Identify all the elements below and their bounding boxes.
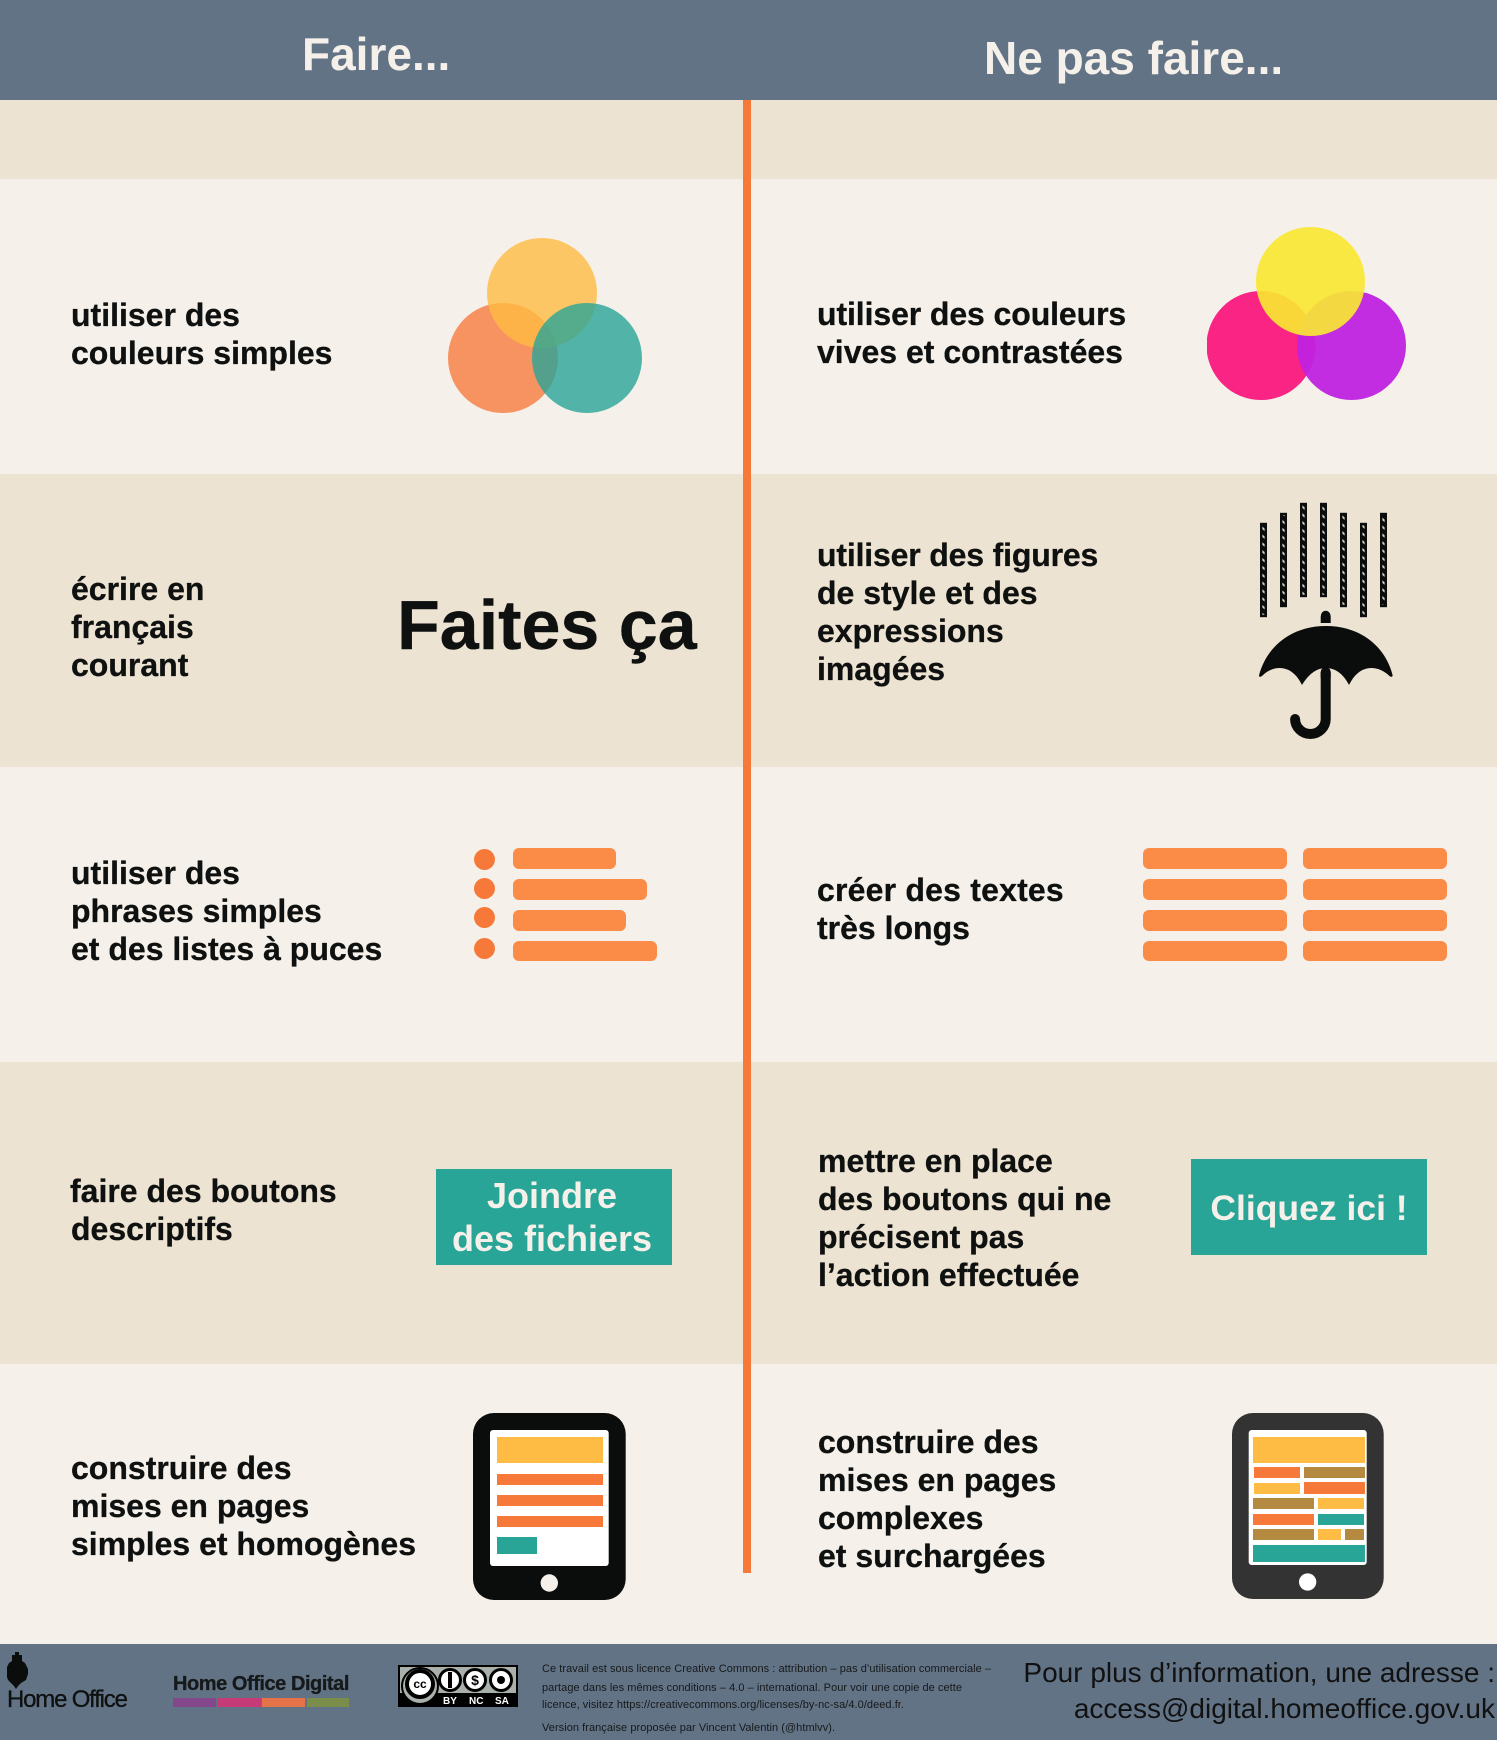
icon: vivid colour circles (1207, 227, 1406, 400)
licence badge: CC BY NC SA: $ (471, 1672, 479, 1688)
text: utiliser des couleurs simples (71, 297, 332, 371)
text: écrire en français courant: écrire en (71, 571, 204, 607)
icon: long text blocks (1143, 848, 1447, 961)
text: mises en pages complexes: et surchargées (818, 1538, 1046, 1574)
text: écrire en français courant: courant (71, 647, 188, 683)
colour strip (173, 1698, 216, 1707)
logo: Home Office Digital (173, 1673, 349, 1707)
licence text: partage dans les mêmes conditions – 4.0 – international. Pour voir une copie de cette (542, 1682, 962, 1694)
text: utiliser des couleurs vives: vives et contrastées (817, 334, 1123, 370)
footer bar (0, 1644, 1497, 1740)
button: Joindre des fichiers: des fichiers (452, 1218, 652, 1259)
icon: soft colour circles (448, 238, 642, 413)
text: mises en pages simples (71, 1450, 416, 1562)
text: utiliser des couleurs vives (817, 296, 1126, 370)
umbrella (1259, 611, 1393, 685)
licence text: Version française proposée par Vincent Valentin (@htmlvv). (542, 1722, 835, 1734)
text: textes très longs: très longs (817, 910, 970, 946)
button: Joindre des fichiers (436, 1169, 672, 1265)
contact text (1023, 1657, 1495, 1724)
header bar (0, 0, 1497, 100)
icon: bullet list (474, 848, 657, 961)
licence text (542, 1663, 991, 1734)
text: boutons sans action: l’action effectuée (818, 1257, 1079, 1293)
wordmark: Home Office Digital (173, 1673, 349, 1695)
text: figures de style: de style et des (817, 575, 1038, 611)
band: row 2 (0, 474, 1497, 767)
licence badge: CC BY NC SA: cc (413, 1677, 427, 1691)
button: Joindre des fichiers: Joindre (487, 1175, 617, 1216)
text: boutons sans action: précisent pas (818, 1219, 1024, 1255)
band: top beige (0, 100, 1497, 179)
text: mises en pages complexes (818, 1424, 1056, 1574)
text: boutons descriptifs: descriptifs (71, 1211, 233, 1247)
text: mises en pages complexes: mises en pages (818, 1462, 1056, 1498)
heading: Faire: Faire... (302, 28, 450, 80)
text: phrases simples: et des listes à puces (71, 931, 382, 967)
icon: complex tablet (1232, 1413, 1384, 1599)
button: Cliquez ici: Cliquez ici ! (1210, 1188, 1408, 1228)
heading: Ne pas faire: Ne pas faire... (984, 32, 1283, 84)
text: textes très longs (817, 872, 1064, 946)
band: row 4 (0, 1062, 1497, 1364)
text: boutons descriptifs: faire des boutons (70, 1173, 337, 1209)
rain streaks (1261, 504, 1386, 616)
licence badge: CC BY NC SA: SA (495, 1696, 509, 1707)
contact text: Pour plus d’information, une adresse : (1023, 1657, 1495, 1688)
text: utiliser des couleurs simples: couleurs simples (71, 335, 332, 371)
text: utiliser des couleurs vives: utiliser des couleurs (817, 296, 1126, 332)
text: boutons sans action: mettre en place (818, 1143, 1053, 1179)
icon: simple tablet (473, 1413, 626, 1600)
text: boutons sans action (818, 1143, 1111, 1293)
text: boutons sans action: des boutons qui ne (818, 1181, 1111, 1217)
button: Cliquez ici (1191, 1159, 1427, 1255)
text: boutons descriptifs (70, 1173, 337, 1247)
text: écrire en français courant (71, 571, 204, 683)
text: écrire en français courant: français (71, 609, 194, 645)
text: figures de style: imagées (817, 651, 945, 687)
example text: Faites ça: Faites ça (397, 586, 697, 664)
crest (7, 1652, 28, 1689)
text: mises en pages simples: mises en pages (71, 1488, 309, 1524)
text: mises en pages simples: construire des (71, 1450, 292, 1486)
text: textes très longs: créer des textes (817, 872, 1064, 908)
licence badge: CC BY NC SA: BY (443, 1696, 457, 1707)
logo: Home Office (7, 1652, 128, 1713)
contact text: access@digital.homeoffice.gov.uk (1074, 1693, 1495, 1724)
text: phrases simples: utiliser des (71, 855, 240, 891)
icon: rain and umbrella (1259, 502, 1393, 739)
licence badge: CC BY NC SA (398, 1665, 518, 1707)
centre divider line (743, 100, 751, 1573)
text: figures de style: utiliser des figures (817, 537, 1098, 573)
text: figures de style (817, 537, 1098, 687)
licence text: licence, visitez https://creativecommons.org/licenses/by-nc-sa/4.0/deed.fr. (542, 1699, 904, 1711)
text: figures de style: expressions (817, 613, 1004, 649)
text: mises en pages complexes: construire des (818, 1424, 1039, 1460)
text: mises en pages complexes: complexes (818, 1500, 983, 1536)
text: phrases simples: phrases simples (71, 893, 322, 929)
licence text: Ce travail est sous licence Creative Commons : attribution – pas d’utilisation commerciale – (542, 1663, 991, 1675)
text: phrases simples (71, 855, 382, 967)
wordmark: Home Office (7, 1686, 127, 1713)
text: utiliser des couleurs simples: utiliser des (71, 297, 240, 333)
licence badge: CC BY NC SA: NC (469, 1696, 483, 1707)
text: mises en pages simples: simples et homogènes (71, 1526, 416, 1562)
